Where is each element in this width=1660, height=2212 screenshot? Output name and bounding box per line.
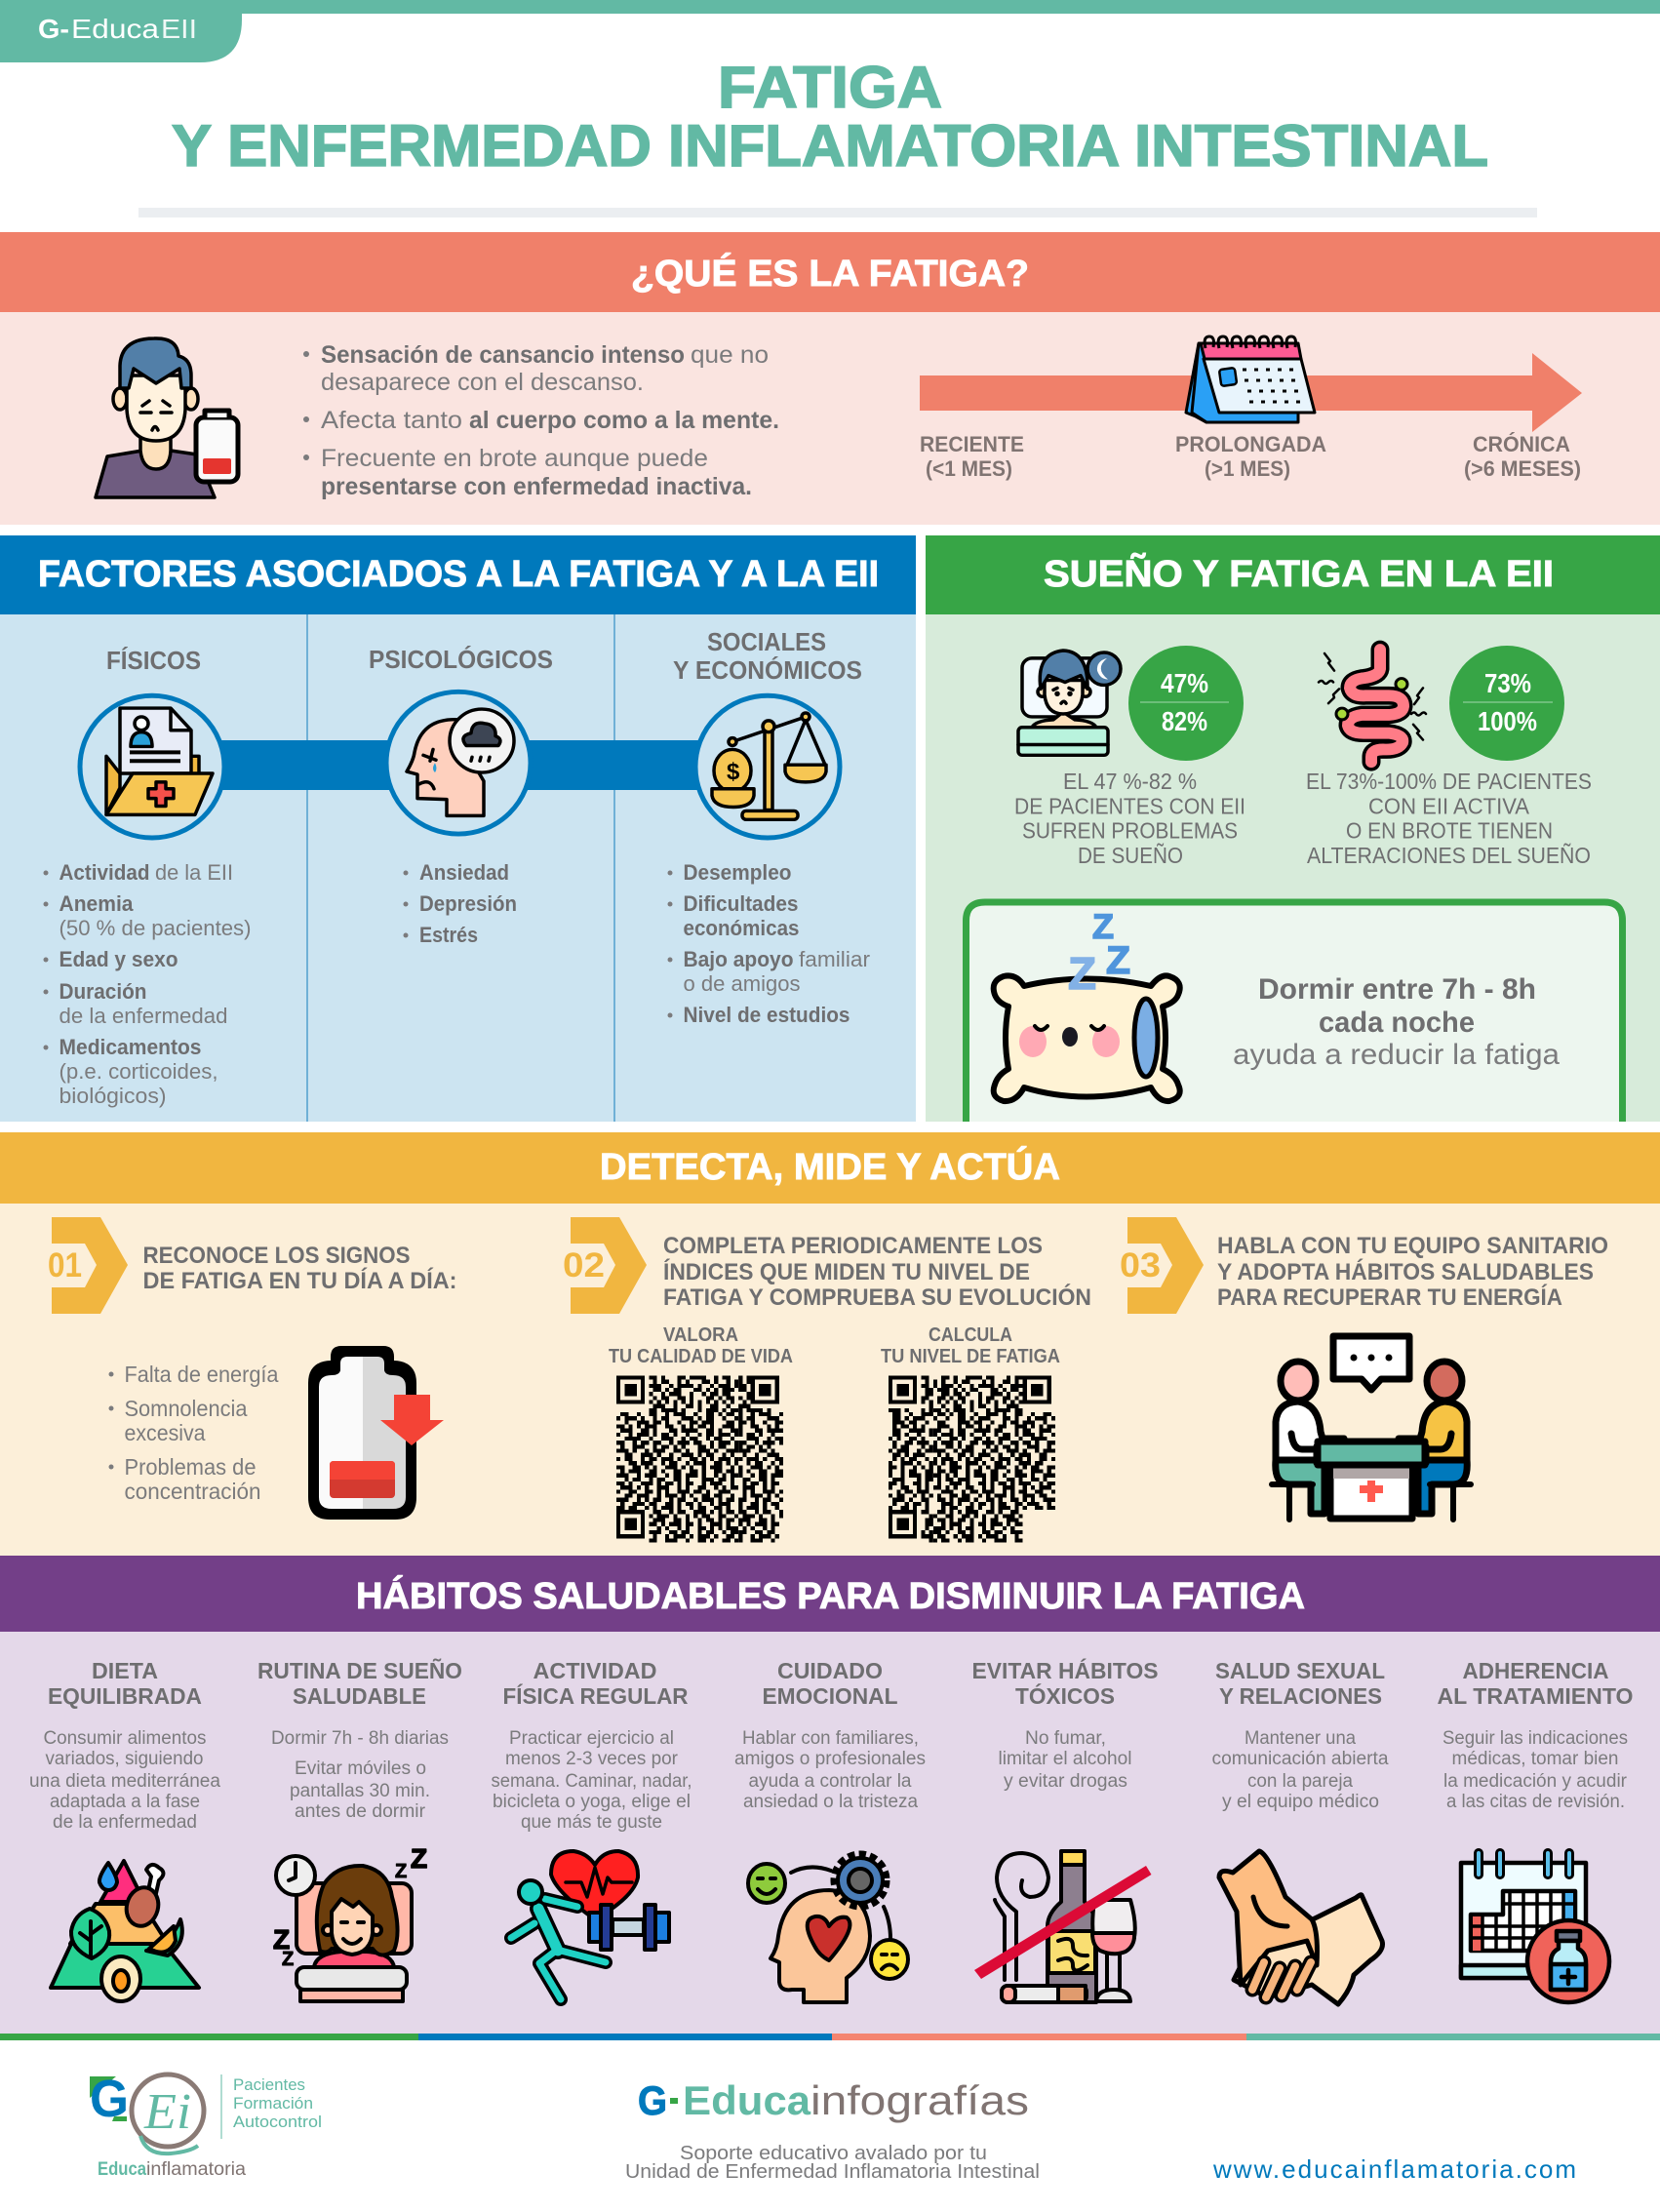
habit: salud sexual y relaciones: Y RELACIONES xyxy=(1219,1683,1382,1709)
heading: qué es la fatiga xyxy=(0,232,1660,312)
label: reciente: RECIENTE xyxy=(920,432,1024,456)
text: sleep advice xyxy=(1233,973,1560,1071)
list: psicológicos: Ansiedad xyxy=(419,860,509,885)
heading: hábitos saludables: HÁBITOS SALUDABLES PARA DISMINUIR LA FATIGA xyxy=(356,1574,1305,1617)
list: psicológicos: Depresión xyxy=(419,891,517,916)
list: signs of fatigue: excesiva xyxy=(125,1420,206,1445)
list: signs of fatigue: concentración xyxy=(125,1479,261,1504)
list: psicológicos xyxy=(404,860,517,947)
text: definition bullets: desaparece con el descanso. xyxy=(321,369,644,396)
icon: woman sleeping: Z xyxy=(273,1924,290,1955)
habit: actividad física: menos 2-3 veces por xyxy=(505,1749,679,1769)
habit: rutina de sueño: Dormir 7h - 8h diarias xyxy=(271,1728,449,1749)
title: Y ENFERMEDAD INFLAMATORIA INTESTINAL xyxy=(172,113,1488,178)
title: FATIGA xyxy=(718,55,942,120)
label: crónica: (>6 MESES) xyxy=(1464,456,1581,481)
list: sociales y económicos: Desempleo xyxy=(683,860,792,885)
step 02: ÍNDICES QUE MIDEN TU NIVEL DE xyxy=(663,1258,1030,1285)
list: físicos xyxy=(43,860,252,1108)
habit: rutina de sueño: pantallas 30 min. xyxy=(290,1781,430,1801)
heading: sueño y fatiga: SUEÑO Y FATIGA EN LA EII xyxy=(1044,552,1554,595)
caption: sleep problems stat: DE PACIENTES CON EII xyxy=(1014,794,1245,819)
habit: rutina de sueño: antes de dormir xyxy=(295,1801,426,1822)
habit: evitar hábitos tóxicos xyxy=(971,1657,1159,1792)
footer logo: Educainflamatoria: Educa xyxy=(98,2159,146,2180)
step 01: DE FATIGA EN TU DÍA A DÍA: xyxy=(142,1267,456,1294)
list: físicos: de la EII xyxy=(155,860,233,885)
caption: active disease stat: CON EII ACTIVA xyxy=(1368,794,1530,819)
heading: sociales y económicos: Y ECONÓMICOS xyxy=(673,655,862,685)
list: sociales y económicos: o de amigos xyxy=(683,971,800,996)
label: prolongada: PROLONGADA xyxy=(1175,432,1326,456)
caption: sleep problems stat xyxy=(1014,769,1245,868)
footer website: www.educainflamatoria.com xyxy=(1212,2154,1576,2184)
stat: 73% to 100%: 73% xyxy=(1484,668,1531,698)
habit: rutina de sueño: RUTINA DE SUEÑO xyxy=(257,1657,462,1683)
label: crónica: CRÓNICA xyxy=(1473,432,1570,456)
habit: adherencia al tratamiento: la medicación y acudir xyxy=(1443,1771,1628,1792)
list: signs of fatigue: Problemas de xyxy=(125,1454,256,1480)
habit: actividad física: semana. Caminar, nadar, xyxy=(492,1771,692,1792)
text: sleep advice: ayuda a reducir la fatiga xyxy=(1233,1039,1560,1071)
list: signs of fatigue: Somnolencia xyxy=(125,1396,248,1421)
caption: sleep problems stat: SUFREN PROBLEMAS xyxy=(1022,817,1238,843)
heading: detecta, mide y actúa xyxy=(0,1132,1660,1204)
icon: patient and doctor talking xyxy=(1272,1336,1471,1520)
step 03: 03 xyxy=(1120,1246,1161,1284)
QR: calidad de vida: VALORA xyxy=(663,1324,738,1346)
text: definition bullets: Frecuente en brote aunque puede xyxy=(321,445,708,472)
footer endorsement text xyxy=(625,2143,1040,2183)
footer brand: G-Educainfografías: G xyxy=(638,2077,667,2123)
list: psicológicos: Estrés xyxy=(419,923,478,947)
footer logo: Educainflamatoria: Pacientes xyxy=(233,2075,305,2094)
step 02 xyxy=(563,1217,1091,1314)
heading: psicológicos: PSICOLÓGICOS xyxy=(369,645,553,674)
footer logo: Educainflamatoria: Autocontrol xyxy=(233,2113,322,2131)
icon: sleeping pillow xyxy=(994,908,1180,1101)
caption: active disease stat: ALTERACIONES DEL SUEÑO xyxy=(1307,843,1591,868)
habit: cuidado emocional xyxy=(734,1658,926,1812)
icon: sleeping pillow: Z xyxy=(1068,948,1096,999)
habit: salud sexual y relaciones: comunicación abierta xyxy=(1211,1749,1389,1769)
habit: rutina de sueño: Evitar móviles o xyxy=(295,1758,426,1779)
habit: cuidado emocional: amigos o profesionales xyxy=(734,1749,926,1769)
footer brand: G-Educainfografías xyxy=(638,2077,1029,2123)
list: signs of fatigue: Falta de energía xyxy=(125,1362,279,1387)
text: definition bullets: presentarse con enfermedad inactiva. xyxy=(321,473,752,500)
habit: evitar hábitos tóxicos: TÓXICOS xyxy=(1015,1682,1115,1709)
habit: cuidado emocional: ayuda a controlar la xyxy=(749,1771,912,1792)
list: sociales y económicos: Nivel de estudios xyxy=(683,1003,850,1027)
habit: adherencia al tratamiento xyxy=(1438,1658,1633,1812)
step 03: Y ADOPTA HÁBITOS SALUDABLES xyxy=(1217,1258,1594,1285)
text: sleep advice: cada noche xyxy=(1319,1007,1475,1039)
brand tab: G-EducaEII xyxy=(0,0,242,62)
icon: woman sleeping: Z xyxy=(282,1949,294,1970)
icon: no smoking or alcohol xyxy=(974,1851,1151,2002)
step 01 xyxy=(48,1217,456,1314)
heading: detecta, mide y actúa: DETECTA, MIDE Y ACTÚA xyxy=(600,1145,1060,1188)
icon: food pyramid xyxy=(51,1861,199,2001)
text: definition bullets: que no xyxy=(691,341,769,369)
text: definition bullets: al cuerpo como a la mente. xyxy=(469,407,779,434)
heading: sueño y fatiga xyxy=(926,535,1660,614)
icon: medical folder xyxy=(80,695,224,838)
habit: salud sexual y relaciones xyxy=(1211,1658,1389,1812)
habit: cuidado emocional: EMOCIONAL xyxy=(763,1683,897,1709)
habit: adherencia al tratamiento: Seguir las indicaciones xyxy=(1443,1728,1628,1749)
habit: dieta equilibrada: EQUILIBRADA xyxy=(48,1683,202,1709)
heading: sociales y económicos: SOCIALES xyxy=(707,627,826,656)
step 01: 01 xyxy=(48,1246,82,1284)
heading: factores asociados: FACTORES ASOCIADOS A LA FATIGA Y A LA EII xyxy=(38,554,879,595)
icon: sleeping pillow: Z xyxy=(1106,939,1130,982)
footer endorsement text: Soporte educativo avalado por tu xyxy=(680,2143,987,2164)
text: definition bullets: Afecta tanto xyxy=(321,407,462,434)
habit: evitar hábitos tóxicos: No fumar, xyxy=(1025,1728,1106,1749)
heading: hábitos saludables xyxy=(0,1556,1660,1632)
list: signs of fatigue xyxy=(109,1362,279,1504)
icon: tired man with low battery xyxy=(96,338,238,497)
footer logo: Educainflamatoria: Formación xyxy=(233,2094,313,2113)
label: crónica xyxy=(1464,432,1581,481)
QR: calidad de vida: TU CALIDAD DE VIDA xyxy=(609,1346,793,1367)
list: físicos: Actividad xyxy=(59,860,150,885)
icon: head with heart and moods xyxy=(748,1855,908,2002)
habit: cuidado emocional: ansiedad o la tristeza xyxy=(743,1792,918,1812)
footer brand: G-Educainfografías: Educa xyxy=(683,2077,811,2123)
footer brand: G-Educainfografías: infografías xyxy=(810,2077,1029,2123)
icon: draining battery xyxy=(308,1346,444,1520)
icon: woman sleeping xyxy=(273,1843,427,2001)
list: sociales y económicos: Dificultades xyxy=(683,891,798,916)
step 03: PARA RECUPERAR TU ENERGÍA xyxy=(1217,1284,1562,1311)
habit: salud sexual y relaciones: SALUD SEXUAL xyxy=(1215,1658,1385,1683)
habit: actividad física: que más te guste xyxy=(521,1812,662,1833)
brand tab: G-EducaEII: EII xyxy=(161,14,197,44)
habit: salud sexual y relaciones: con la pareja xyxy=(1247,1771,1353,1792)
list: físicos: de la enfermedad xyxy=(59,1004,228,1028)
step 02: 02 xyxy=(563,1246,605,1284)
panel: sueño y fatiga xyxy=(926,535,1660,1122)
callout: sleep recommendation xyxy=(966,902,1623,1122)
habit: adherencia al tratamiento: médicas, tomar bien xyxy=(1451,1749,1619,1769)
QR: calidad de vida xyxy=(609,1324,849,1543)
brand tab: G-EducaEII: Educa xyxy=(71,14,159,44)
habit: actividad física: ACTIVIDAD xyxy=(533,1658,657,1683)
habit: rutina de sueño: SALUDABLE xyxy=(293,1683,426,1709)
habit: dieta equilibrada: DIETA xyxy=(92,1658,158,1683)
habit: actividad física xyxy=(492,1658,692,1833)
icon: runner, heart and dumbbell xyxy=(511,1851,669,1999)
list: físicos: Anemia xyxy=(59,891,134,916)
habit: dieta equilibrada: variados, siguiendo xyxy=(45,1749,203,1769)
icon: person awake in bed xyxy=(1018,651,1121,755)
title xyxy=(172,55,1488,178)
stat: 73% to 100%: 100% xyxy=(1478,706,1537,736)
footer logo: Educainflamatoria xyxy=(90,2070,322,2180)
habit: dieta equilibrada: una dieta mediterránea xyxy=(29,1771,220,1792)
icon: sad head with cloud xyxy=(386,691,531,834)
list: sociales y económicos xyxy=(667,860,870,1027)
list: físicos: biológicos) xyxy=(59,1084,166,1108)
icon: inflamed intestine xyxy=(1319,650,1426,762)
footer logo: Educainflamatoria: Ei xyxy=(143,2084,191,2140)
habit: dieta equilibrada: adaptada a la fase xyxy=(50,1792,200,1812)
habit: adherencia al tratamiento: a las citas de revisión. xyxy=(1446,1792,1625,1812)
caption: sleep problems stat: EL 47 %-82 % xyxy=(1063,769,1197,794)
heading: qué es la fatiga: ¿QUÉ ES LA FATIGA? xyxy=(631,252,1029,295)
brand tab: G-EducaEII: G- xyxy=(38,14,69,44)
step 03 xyxy=(1120,1217,1608,1314)
label: prolongada xyxy=(1175,432,1326,481)
caption: active disease stat xyxy=(1306,769,1592,868)
habit: actividad física: Practicar ejercicio al xyxy=(509,1728,674,1749)
icon: woman sleeping: Z xyxy=(411,1843,427,1874)
habit: cuidado emocional: CUIDADO xyxy=(777,1658,883,1683)
text: definition bullets xyxy=(303,341,779,500)
footer endorsement text: Unidad de Enfermedad Inflamatoria Intestinal xyxy=(625,2161,1040,2183)
habit: salud sexual y relaciones: y el equipo médico xyxy=(1222,1792,1379,1812)
habit: dieta equilibrada xyxy=(29,1658,220,1833)
list: sociales y económicos: familiar xyxy=(799,947,870,971)
list: sociales y económicos: Bajo apoyo xyxy=(683,947,794,971)
icon: calendar and medication xyxy=(1461,1853,1609,2002)
habit: dieta equilibrada: de la enfermedad xyxy=(53,1812,197,1833)
icon: holding hands xyxy=(1219,1851,1383,2004)
step 02: COMPLETA PERIODICAMENTE LOS xyxy=(663,1233,1043,1259)
footer logo: Educainflamatoria: inflamatoria xyxy=(146,2159,246,2180)
text: definition bullets: Sensación de cansancio intenso xyxy=(321,341,685,369)
list: físicos: Duración xyxy=(59,979,146,1004)
caption: sleep problems stat: DE SUEÑO xyxy=(1078,843,1183,868)
habit: salud sexual y relaciones: Mantener una xyxy=(1245,1728,1356,1749)
icon: sleeping pillow: Z xyxy=(1092,908,1114,946)
heading: físicos: FÍSICOS xyxy=(106,646,201,675)
step 03: HABLA CON TU EQUIPO SANITARIO xyxy=(1217,1233,1608,1259)
habit: actividad física: bicicleta o yoga, elige el xyxy=(493,1792,691,1812)
caption: active disease stat: O EN BROTE TIENEN xyxy=(1346,817,1553,843)
heading: sociales y económicos xyxy=(673,627,862,685)
habit: cuidado emocional: Hablar con familiares, xyxy=(742,1728,919,1749)
icon: scale with dollar xyxy=(695,695,840,838)
icon: scale with dollar: $ xyxy=(727,759,739,785)
habit: adherencia al tratamiento: ADHERENCIA xyxy=(1463,1658,1609,1683)
list: sociales y económicos: económicas xyxy=(683,916,800,940)
step 01: RECONOCE LOS SIGNOS xyxy=(142,1243,410,1269)
icon: woman sleeping: Z xyxy=(395,1861,407,1882)
QR: nivel de fatiga: CALCULA xyxy=(929,1324,1012,1346)
habit: rutina de sueño xyxy=(257,1657,462,1822)
label: reciente xyxy=(920,432,1024,481)
habit: adherencia al tratamiento: AL TRATAMIENTO xyxy=(1438,1683,1633,1709)
panel: qué es la fatiga xyxy=(0,232,1660,525)
habit: evitar hábitos tóxicos: limitar el alcohol xyxy=(999,1749,1131,1769)
arrow: duration timeline xyxy=(920,353,1582,432)
list: físicos: (p.e. corticoides, xyxy=(59,1059,217,1084)
list: físicos: (50 % de pacientes) xyxy=(59,916,252,940)
panel: factores asociados xyxy=(0,535,916,1122)
habit: dieta equilibrada: Consumir alimentos xyxy=(43,1728,207,1749)
stat: 47% to 82%: 82% xyxy=(1162,706,1207,736)
habit: evitar hábitos tóxicos: y evitar drogas xyxy=(1004,1771,1127,1792)
QR: nivel de fatiga xyxy=(844,1324,1060,1543)
habit: evitar hábitos tóxicos: EVITAR HÁBITOS xyxy=(971,1657,1159,1683)
panel: hábitos saludables xyxy=(0,1556,1660,2034)
panel: detecta, mide y actúa xyxy=(0,1132,1660,1556)
step 02: FATIGA Y COMPRUEBA SU EVOLUCIÓN xyxy=(663,1284,1091,1311)
caption: active disease stat: EL 73%-100% DE PACIENTES xyxy=(1306,769,1592,794)
stat: 47% to 82%: 47% xyxy=(1161,668,1208,698)
label: reciente: (<1 MES) xyxy=(926,456,1012,481)
stat: 47% to 82% xyxy=(1128,646,1244,761)
list: físicos: Edad y sexo xyxy=(59,947,178,971)
footer logo: Educainflamatoria: G xyxy=(90,2070,129,2128)
habit: actividad física: FÍSICA REGULAR xyxy=(503,1682,689,1709)
text: sleep advice: Dormir entre 7h - 8h xyxy=(1258,973,1536,1006)
list: físicos: Medicamentos xyxy=(59,1035,201,1059)
icon: calendar xyxy=(1186,336,1315,422)
QR: nivel de fatiga: TU NIVEL DE FATIGA xyxy=(881,1346,1060,1367)
top teal bar xyxy=(0,0,1660,14)
heading: factores asociados xyxy=(0,535,916,614)
footer colour bar xyxy=(0,2034,1660,2040)
stat: 73% to 100% xyxy=(1449,646,1564,761)
label: prolongada: (>1 MES) xyxy=(1205,456,1290,481)
